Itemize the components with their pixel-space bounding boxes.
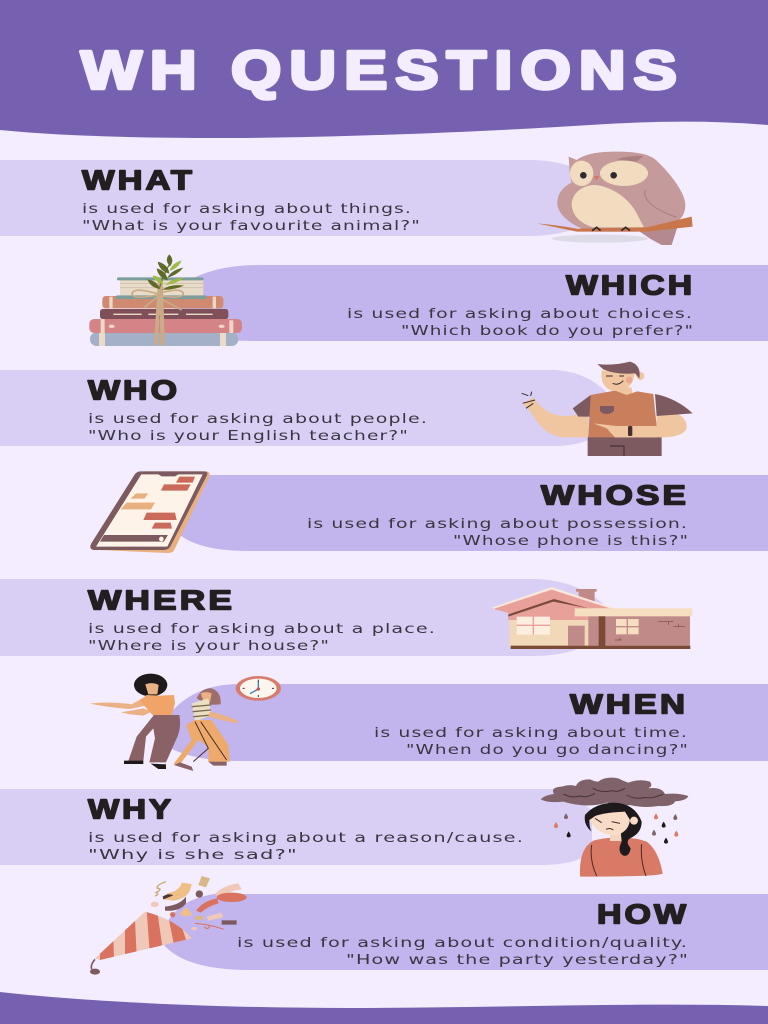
text: why description: is used for asking about a reason/cause.	[88, 830, 524, 846]
icon: phone	[90, 471, 210, 553]
icon: man	[522, 362, 693, 456]
text: whose example: "Whose phone is this?"	[453, 533, 689, 549]
heading: whose: WHOSE	[541, 480, 689, 510]
icon: party popper	[90, 876, 247, 975]
panel: who	[0, 362, 693, 456]
panel: which	[89, 254, 768, 346]
text: which example: "Which book do you prefer?"	[401, 323, 694, 339]
panel: where	[0, 579, 692, 656]
header banner	[0, 0, 768, 138]
text: what description: is used for asking about things.	[82, 201, 412, 217]
heading: who: WHO	[88, 374, 180, 406]
text: where example: "Where is your house?"	[88, 638, 330, 654]
heading: why: WHY	[88, 794, 174, 824]
heading: where: WHERE	[88, 584, 235, 616]
icon: owl	[537, 152, 693, 245]
text: whose description: is used for asking about possession.	[307, 516, 688, 532]
icon: books and plant	[89, 254, 242, 346]
heading: when: WHEN	[570, 688, 688, 720]
icon: house	[492, 587, 692, 649]
text: who example: "Who is your English teacher?"	[88, 428, 409, 444]
text: when description: is used for asking about time.	[374, 725, 688, 741]
footer wave	[0, 992, 768, 1024]
panel: how	[90, 876, 768, 975]
text: how example: "How was the party yesterday?"	[346, 952, 689, 968]
panel: when	[89, 674, 768, 771]
text: why example: "Why is she sad?"	[88, 847, 298, 863]
text: who description: is used for asking about people.	[88, 411, 428, 427]
text: how description: is used for asking about condition/quality.	[237, 935, 688, 951]
heading: how: HOW	[597, 898, 689, 930]
text: where description: is used for asking about a place.	[88, 621, 436, 637]
icon: dancers and clock	[89, 674, 281, 771]
panel: what	[0, 152, 693, 245]
text: when example: "When do you go dancing?"	[406, 742, 689, 758]
text: which description: is used for asking about choices.	[347, 306, 693, 322]
heading: what: WHAT	[82, 164, 195, 196]
panel: whose	[90, 471, 768, 553]
title: WH QUESTIONS	[81, 40, 685, 100]
panel: why	[0, 778, 688, 877]
icon: clock	[236, 676, 281, 701]
heading: which: WHICH	[566, 270, 695, 300]
text: what example: "What is your favourite animal?"	[82, 218, 421, 234]
icon: sad woman under cloud	[541, 778, 688, 877]
